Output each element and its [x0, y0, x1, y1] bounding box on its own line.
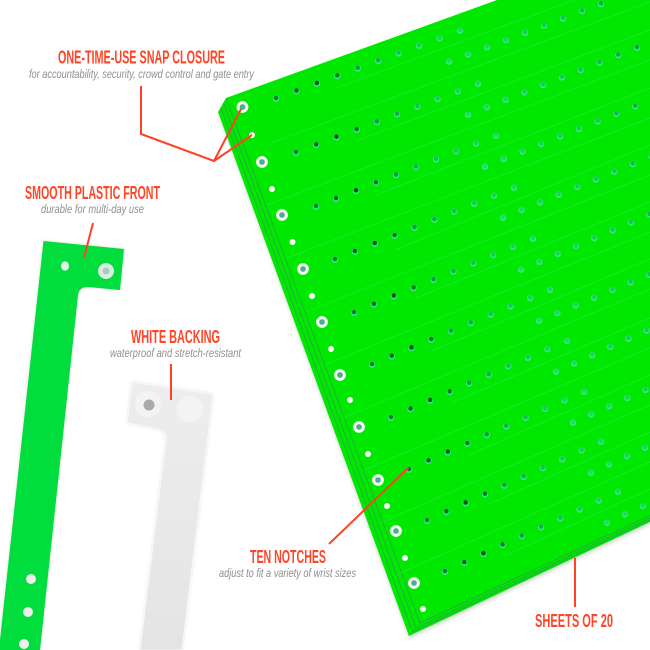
callout: smooth plastic front: SMOOTH PLASTIC FRONT	[25, 182, 160, 203]
notch rows, set A	[276, 30, 618, 572]
snap eyelets	[238, 103, 418, 587]
callout: white backing: waterproof and stretch-resistant	[110, 346, 242, 360]
callout: sheets of 20	[535, 558, 613, 631]
callout: white backing	[110, 326, 242, 400]
callout: one-time-use snap closure	[29, 46, 255, 161]
notch rows, set B	[449, 0, 650, 523]
band separator lines	[267, 0, 650, 574]
panel: white wristband backing	[127, 382, 213, 650]
callout: smooth plastic front	[25, 182, 160, 258]
callout: white backing: WHITE BACKING	[131, 326, 220, 347]
callout: one-time-use snap closure: ONE-TIME-USE SNAP CLOSURE	[58, 46, 225, 68]
callout: smooth plastic front: durable for multi-day use	[41, 202, 144, 216]
callout: ten notches: adjust to fit a variety of wrist sizes	[219, 566, 356, 580]
callout: ten notches	[219, 468, 408, 580]
snap stud holes	[249, 132, 426, 612]
panel: sheet stack of green wristbands	[218, 0, 650, 639]
callout: one-time-use snap closure: for accountability, security, crowd control and gate entry	[29, 67, 255, 81]
panel: green wristband front	[0, 241, 124, 650]
callout: ten notches: TEN NOTCHES	[250, 546, 326, 567]
